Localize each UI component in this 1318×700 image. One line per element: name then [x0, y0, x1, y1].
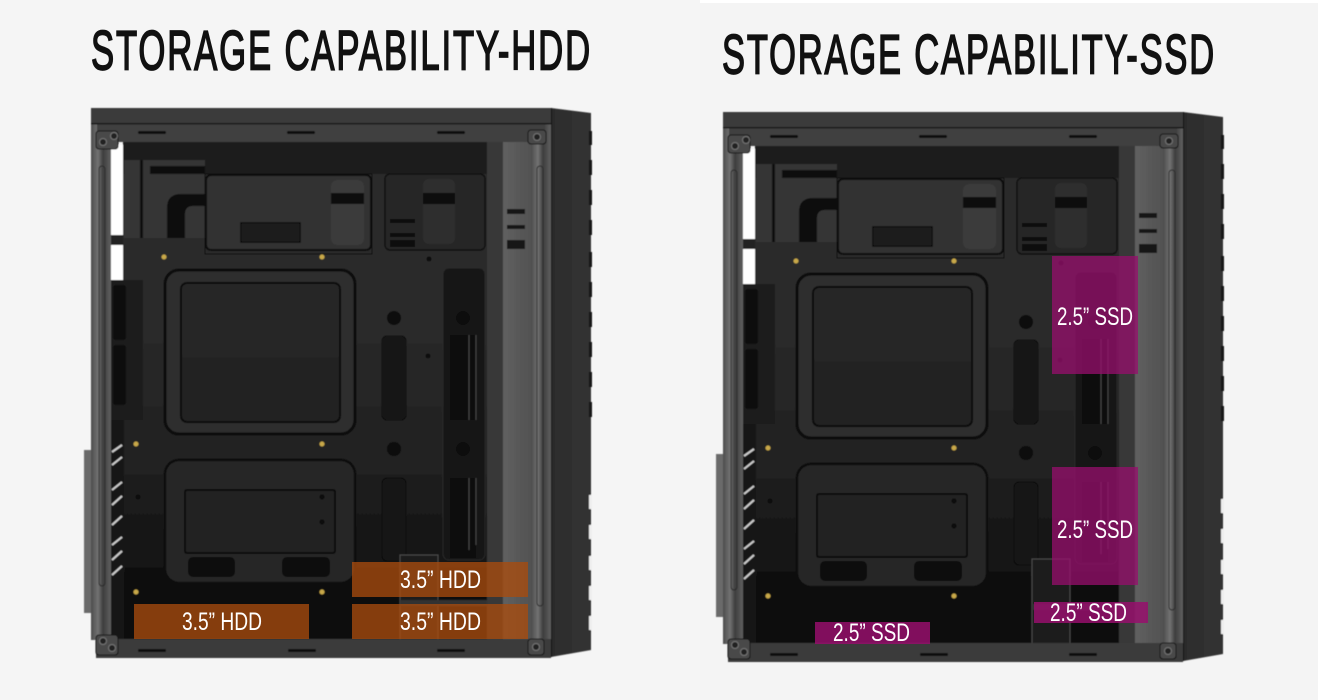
PC case: HDD view [84, 108, 592, 658]
HDD bay lower left [134, 604, 309, 639]
SSD bay middle [1052, 467, 1138, 585]
background: right half panel [700, 3, 1318, 700]
SSD bay lower left: 2.5” SSD [833, 619, 910, 647]
SSD bay upper [1052, 256, 1138, 374]
HDD bay upper right: 3.5” HDD [400, 566, 481, 594]
HDD bay upper right [352, 562, 528, 597]
HDD bay lower left: 3.5” HDD [182, 608, 262, 636]
background strip [700, 0, 1318, 3]
SSD bay upper: 2.5” SSD [1057, 303, 1133, 331]
title: HDD: STORAGE CAPABILITY-HDD [91, 18, 592, 82]
HDD bay lower right: 3.5” HDD [400, 608, 481, 636]
HDD bay lower right [352, 604, 528, 639]
SSD bay lower right: 2.5” SSD [1050, 599, 1127, 627]
SSD bay middle: 2.5” SSD [1057, 516, 1133, 544]
PC case: SSD view [716, 112, 1224, 662]
